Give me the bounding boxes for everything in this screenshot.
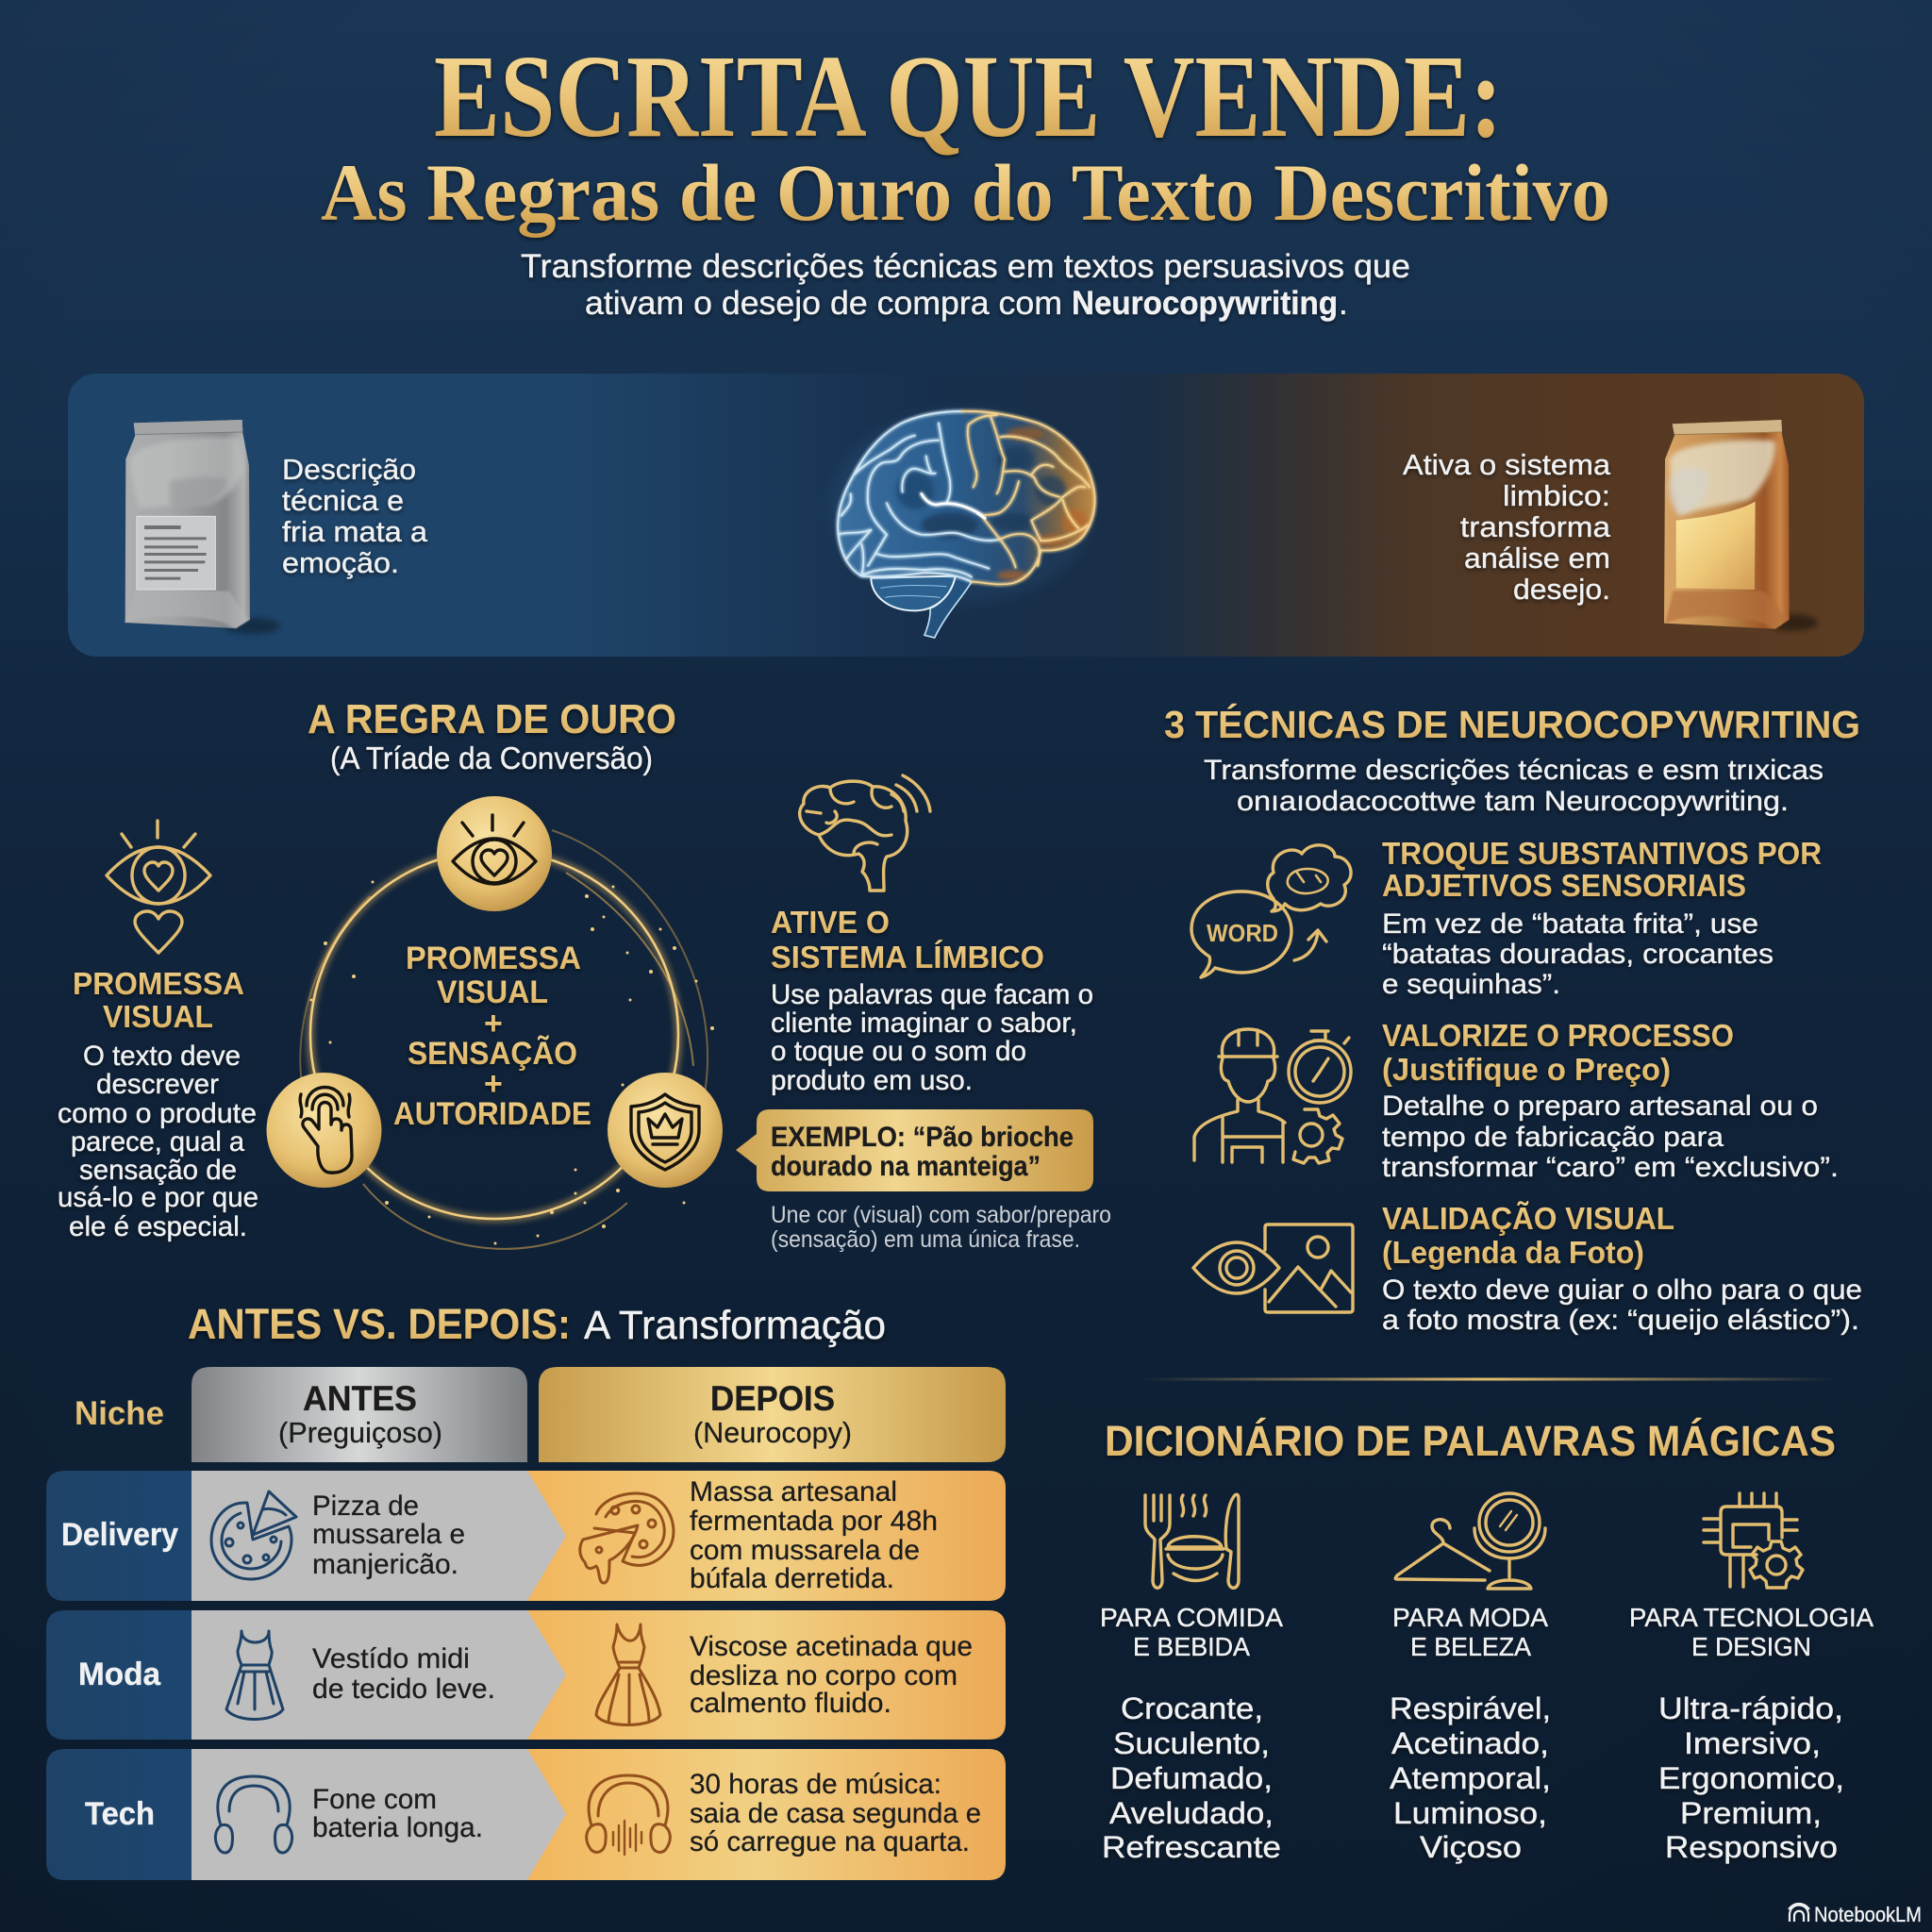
icon: word and thought bubbles: WORD: [1207, 919, 1278, 947]
section: techniques heading: [1164, 703, 1860, 817]
row: delivery: búfala derretida.: [690, 1563, 894, 1594]
title block: As Regras de Ouro do Texto Descritivo: [321, 147, 1610, 238]
section: dictionary heading: DICIONÁRIO DE PALAVRAS MÁGICAS: [1105, 1417, 1836, 1465]
icon: fork, knife, burger: [1145, 1494, 1239, 1588]
technique 2: Detalhe o preparo artesanal ou o: [1382, 1091, 1818, 1122]
note: (sensação) em uma única frase.: [771, 1226, 1080, 1253]
technique 1: ADJETIVOS SENSORIAIS: [1382, 868, 1746, 903]
subtitle: Transforme descrições técnicas em textos persuasivos que: [521, 248, 1410, 285]
row: moda: de tecido leve.: [312, 1674, 495, 1705]
section: golden rule heading: A REGRA DE OURO: [308, 696, 676, 742]
ring center text: AUTORIDADE: [393, 1096, 591, 1132]
text: limbic system rule: SISTEMA LÍMBICO: [771, 940, 1044, 974]
header: antes: [192, 1367, 527, 1462]
row: tech: [46, 1749, 1006, 1880]
text: promessa visual: ele é especial.: [69, 1211, 247, 1242]
row: delivery: com mussarela de: [690, 1535, 920, 1566]
row: delivery: Massa artesanal: [690, 1476, 897, 1507]
text: technical description: técnica e: [282, 484, 404, 517]
dictionary: fashion: Atemporal,: [1390, 1761, 1551, 1795]
icon: golden bag: [1664, 420, 1818, 631]
section: before/after heading: ANTES VS. DEPOIS:: [188, 1300, 571, 1348]
title block: [321, 32, 1610, 238]
subtitle: ativam o desejo de compra com: [585, 285, 1062, 322]
section: before/after heading: A Transformação: [584, 1303, 886, 1348]
dictionary: technology: E DESIGN: [1691, 1632, 1811, 1661]
dictionary: technology: [1629, 1493, 1874, 1864]
dictionary: fashion: PARA MODA: [1392, 1603, 1548, 1632]
row: moda: Viscose acetinada que: [690, 1631, 973, 1662]
niche label: Niche: [75, 1395, 164, 1432]
dictionary: fashion: E BELEZA: [1410, 1632, 1531, 1661]
section: golden rule heading: (A Tríade da Conversão): [330, 741, 653, 775]
dictionary: food: Aveludado,: [1109, 1796, 1274, 1830]
icon: melting pizza: [580, 1493, 674, 1583]
ring center text: PROMESSA: [406, 941, 581, 976]
text: promessa visual: PROMESSA: [73, 966, 244, 1001]
text: technical description: emoção.: [282, 546, 399, 579]
text: limbic system: limbico:: [1503, 479, 1610, 512]
dictionary: fashion: Luminoso,: [1393, 1796, 1547, 1830]
row: moda: calmento fluido.: [690, 1688, 891, 1719]
text: promessa visual: VISUAL: [103, 999, 213, 1034]
icon: word and thought bubbles: [1191, 845, 1351, 977]
dictionary: fashion: Viçoso: [1420, 1830, 1522, 1864]
icon: plain headphones: [215, 1776, 292, 1853]
header: antes: ANTES: [303, 1379, 417, 1418]
text: promessa visual: O texto deve: [83, 1041, 241, 1072]
dictionary: fashion: [1390, 1493, 1551, 1864]
icon: headphones with sound: [587, 1775, 670, 1855]
ring center text: +: [484, 1066, 503, 1102]
ring center text: SENSAÇÃO: [408, 1036, 577, 1072]
dictionary: food: Defumado,: [1110, 1761, 1273, 1795]
row: tech: só carregue na quarta.: [690, 1826, 970, 1857]
text: limbic system rule: [736, 775, 1111, 1253]
icon: chip and gear: [1704, 1493, 1803, 1588]
node: shield with crown: [608, 1073, 723, 1188]
header: depois: DEPOIS: [710, 1379, 835, 1418]
row: tech: Tech: [85, 1796, 155, 1832]
technique 1: e sequinhas”.: [1382, 969, 1560, 1000]
row: tech: bateria longa.: [312, 1812, 483, 1843]
icon: simple dress: [226, 1631, 283, 1719]
technique 3: a foto mostra (ex: “queijo elástico”).: [1382, 1305, 1859, 1336]
technique 2: VALORIZE O PROCESSO: [1382, 1018, 1734, 1053]
icon: eye with heart: [107, 821, 210, 953]
header: depois: [539, 1367, 1006, 1462]
text: limbic system: Ativa o sistema: [1403, 448, 1611, 481]
callout: example: EXEMPLO: “Pão brioche: [771, 1122, 1074, 1153]
section: techniques heading: onıaıodacocottwe tam Neurocopywriting.: [1237, 786, 1789, 817]
row: moda: [46, 1610, 1006, 1740]
row: moda: Vestído midi: [312, 1643, 470, 1674]
technique 3: (Legenda da Foto): [1382, 1235, 1644, 1270]
row: delivery: mussarela e: [312, 1519, 465, 1550]
dictionary: technology: Imersivo,: [1684, 1726, 1821, 1760]
node: eye: [437, 796, 552, 911]
ring center text: VISUAL: [437, 974, 548, 1010]
row: delivery: [46, 1471, 1006, 1601]
row: tech: Fone com: [312, 1784, 437, 1815]
text: limbic system: transforma: [1460, 510, 1611, 543]
ring center text: +: [484, 1006, 503, 1041]
text: promessa visual: parece, qual a: [71, 1126, 244, 1158]
panel: from cold description to desire: [68, 374, 1864, 657]
row: delivery: Delivery: [61, 1517, 178, 1553]
icon: eye and photo: [1193, 1224, 1353, 1312]
row: tech: 30 horas de música:: [690, 1769, 941, 1800]
icon: brain with signal: [800, 775, 930, 891]
table: before/after: [46, 1367, 1006, 1880]
node: touch: [266, 1073, 381, 1188]
text: limbic system rule: ATIVE O: [771, 905, 890, 940]
dictionary: food: E BEBIDA: [1133, 1632, 1250, 1661]
subtitle: Neurocopywriting: [1072, 285, 1338, 322]
technique 1: [1191, 836, 1822, 1000]
row: moda: Moda: [78, 1657, 161, 1692]
icon: glowing brain: [830, 408, 1095, 638]
technique 2: [1194, 1018, 1839, 1183]
text: promessa visual: descrever: [96, 1069, 219, 1100]
text: technical description: Descrição: [282, 453, 416, 486]
note: [771, 1202, 1111, 1253]
row: moda: desliza no corpo com: [690, 1660, 958, 1691]
text: limbic system: desejo.: [1513, 573, 1610, 606]
text: limbic system: [1403, 448, 1611, 606]
text: technical description: fria mata a: [282, 515, 428, 548]
callout: example: dourado na manteiga”: [771, 1151, 1041, 1182]
sparkles: [309, 881, 714, 1245]
title block: ESCRITA QUE VENDE:: [434, 32, 1503, 162]
icon: flowing dress: [596, 1624, 660, 1724]
text: limbic system rule: cliente imaginar o sabor,: [771, 1008, 1077, 1039]
section: techniques heading: Transforme descrições técnicas e esm trıxicas: [1204, 755, 1824, 786]
row: delivery: fermentada por 48h: [690, 1506, 938, 1537]
dictionary: food: [1100, 1494, 1283, 1864]
technique 2: (Justifique o Preço): [1382, 1052, 1671, 1087]
text: promessa visual: como o produte: [58, 1098, 257, 1129]
icon: plain pizza: [211, 1491, 296, 1579]
header: antes: (Preguiçoso): [278, 1416, 442, 1449]
dictionary: food: Refrescante: [1102, 1830, 1281, 1864]
stem and cerebellum: [871, 575, 972, 638]
section: golden rule heading: [308, 696, 676, 775]
dictionary: food: Crocante,: [1121, 1691, 1263, 1725]
technique 1: “batatas douradas, crocantes: [1382, 939, 1774, 970]
dictionary: fashion: Respirável,: [1390, 1691, 1551, 1725]
technique 2: tempo de fabricação para: [1382, 1122, 1724, 1153]
technique 1: TROQUE SUBSTANTIVOS POR: [1382, 836, 1822, 871]
header: depois: (Neurocopy): [693, 1416, 852, 1449]
text: technical description: [282, 453, 428, 579]
subtitle: [521, 248, 1410, 322]
golden ring: [300, 830, 708, 1249]
dictionary: technology: Ergonomico,: [1658, 1761, 1844, 1795]
watermark: NotebookLM: NotebookLM: [1814, 1903, 1922, 1926]
note: Une cor (visual) com sabor/preparo: [771, 1202, 1111, 1228]
icon: silver bag: [125, 420, 280, 634]
technique 2: transformar “caro” em “exclusivo”.: [1382, 1152, 1839, 1183]
technique 1: Em vez de “batata frita”, use: [1382, 908, 1758, 940]
technique 3: VALIDAÇÃO VISUAL: [1382, 1201, 1674, 1236]
dictionary: technology: Ultra-rápido,: [1658, 1691, 1843, 1725]
dictionary: fashion: Acetinado,: [1391, 1726, 1549, 1760]
section: before/after heading: [188, 1300, 886, 1348]
text: limbic system rule: Use palavras que facam o: [771, 979, 1093, 1010]
text: promessa visual: sensação de: [79, 1155, 237, 1186]
technique 3: O texto deve guiar o olho para o que: [1382, 1274, 1862, 1306]
callout: example: [736, 1109, 1093, 1191]
text: limbic system rule: o toque ou o som do: [771, 1036, 1026, 1067]
row: tech: saia de casa segunda e: [690, 1798, 981, 1829]
section: techniques heading: 3 TÉCNICAS DE NEUROCOPYWRITING: [1164, 703, 1860, 746]
text: limbic system rule: produto em uso.: [771, 1065, 973, 1096]
dictionary: food: PARA COMIDA: [1100, 1603, 1283, 1632]
icon: worker, stopwatch, gear: [1194, 1029, 1351, 1163]
text: promessa visual: [58, 821, 258, 1242]
technique 3: [1193, 1201, 1862, 1336]
diagram: triad ring: [266, 796, 723, 1249]
row: delivery: manjericão.: [312, 1549, 458, 1580]
dictionary: food: Suculento,: [1113, 1726, 1270, 1760]
text: promessa visual: usá-lo e por que: [58, 1182, 258, 1213]
subtitle: .: [1339, 285, 1348, 322]
dictionary: technology: PARA TECNOLOGIA: [1629, 1603, 1874, 1632]
row: delivery: Pizza de: [312, 1491, 419, 1522]
dictionary: technology: Responsivo: [1665, 1830, 1838, 1864]
dictionary: technology: Premium,: [1680, 1796, 1822, 1830]
icon: hanger and mirror: [1395, 1493, 1545, 1589]
ring center text: [393, 941, 591, 1132]
text: limbic system: análise em: [1464, 541, 1610, 575]
